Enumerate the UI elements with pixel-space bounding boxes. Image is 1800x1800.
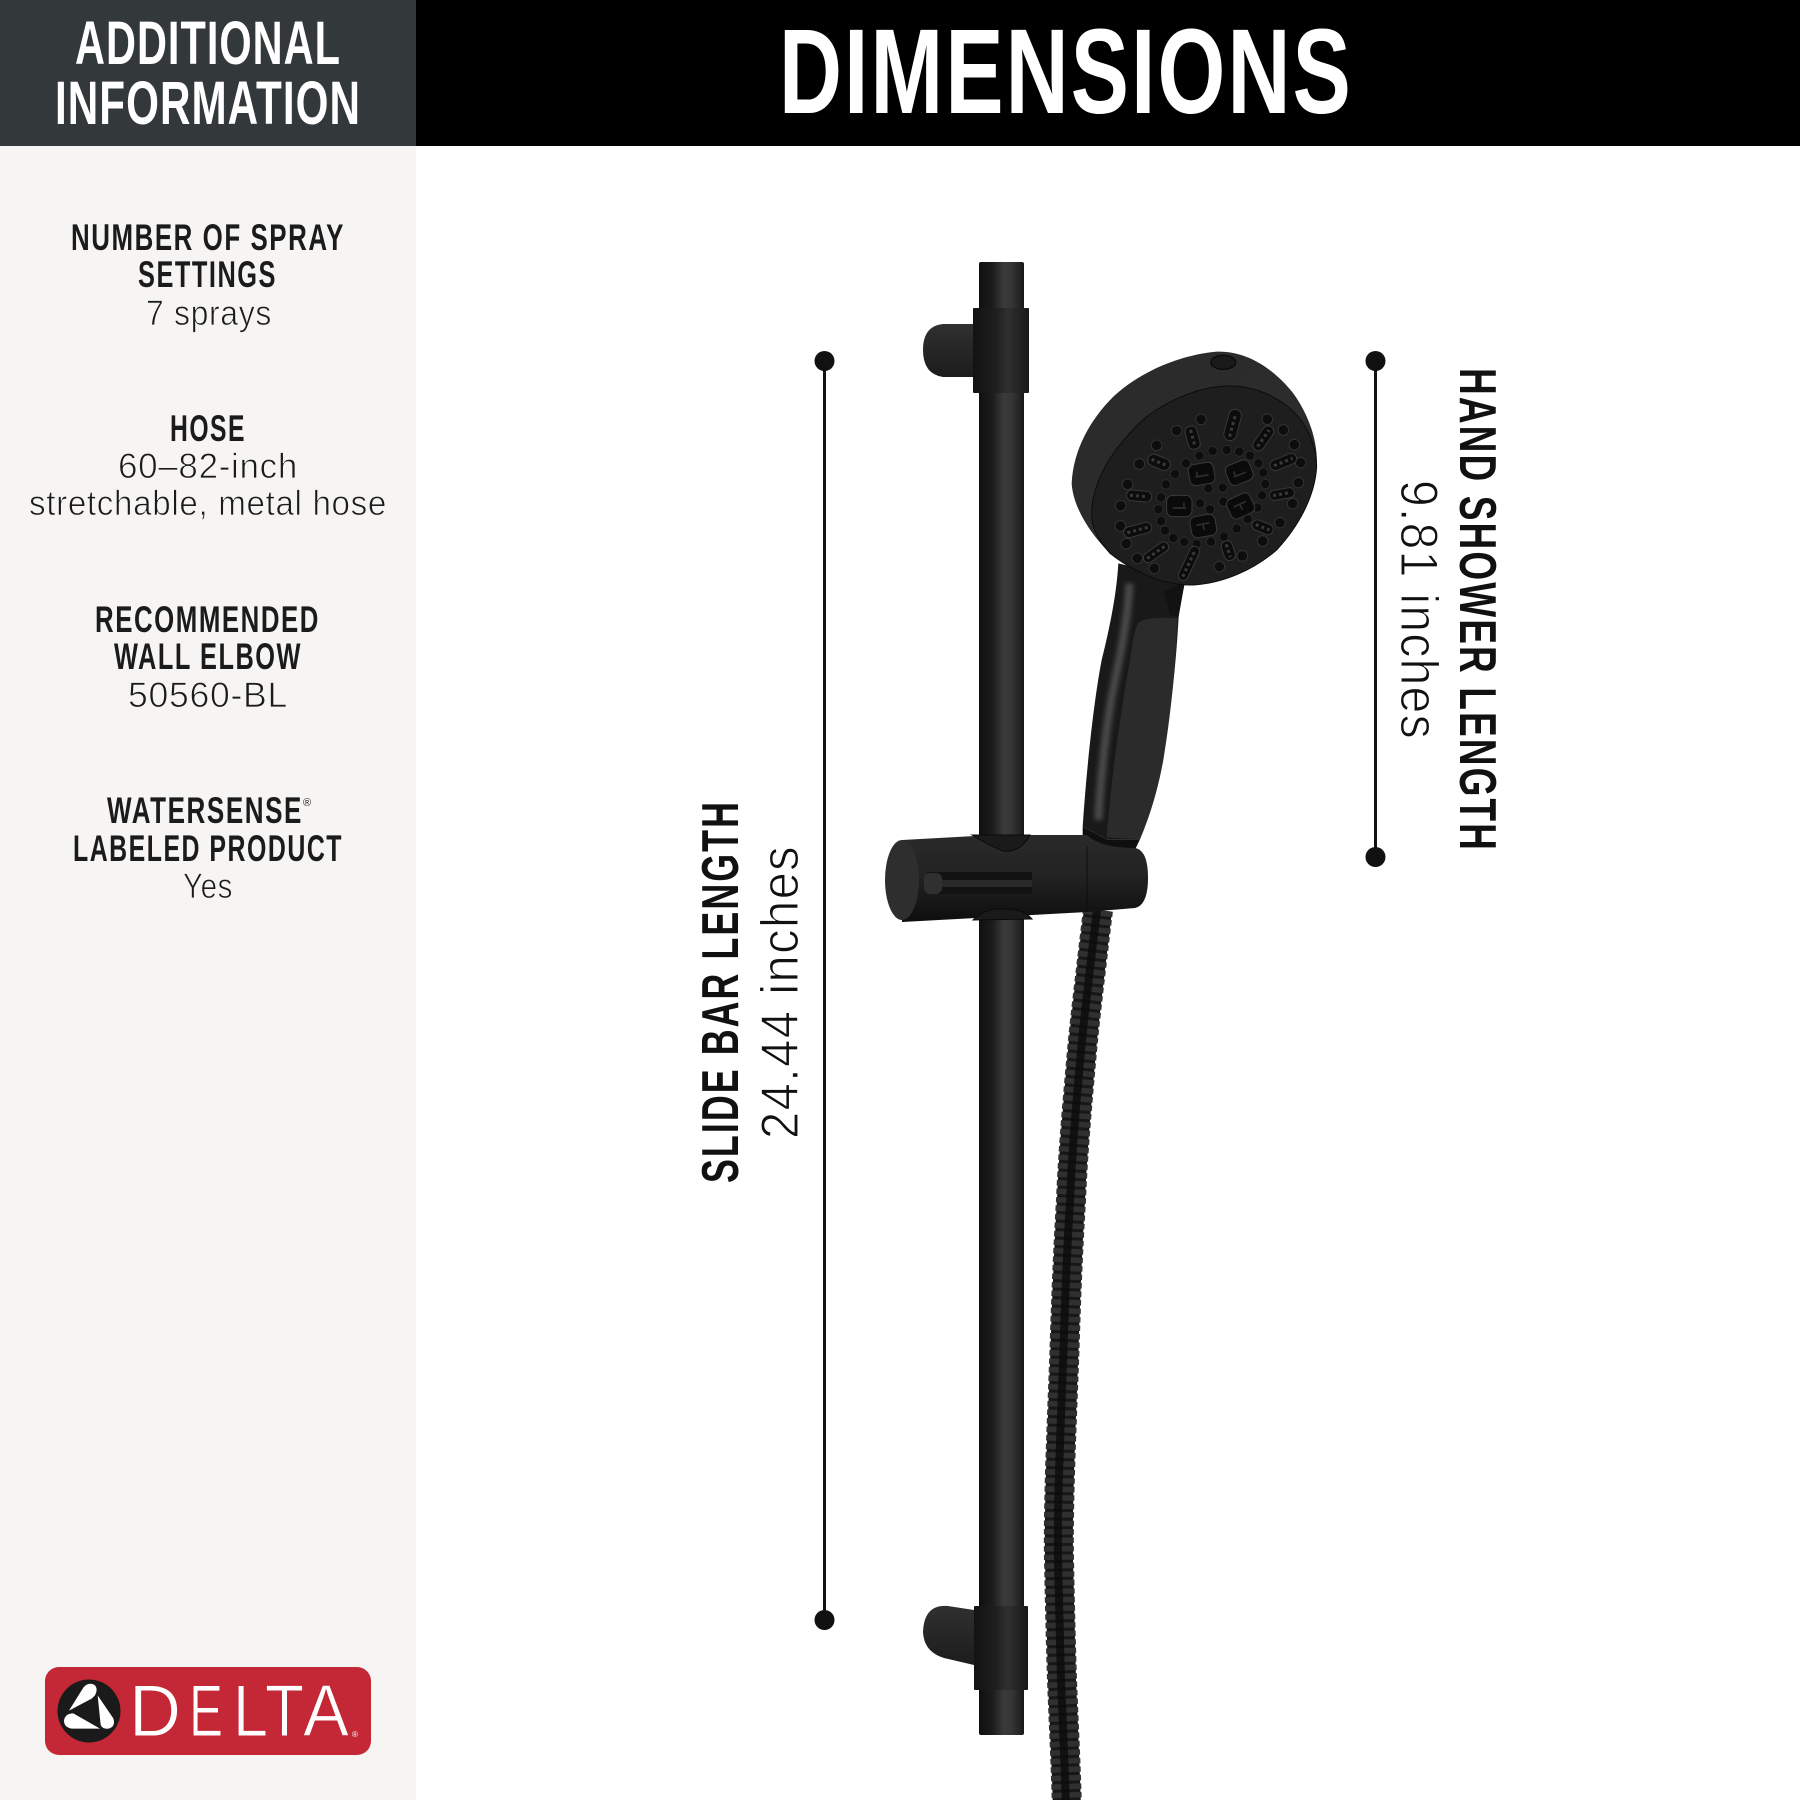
spec: watersense labeled product: WATERSENSE: [107, 790, 303, 831]
product: slider clamp: [885, 835, 1148, 922]
top button: [1211, 355, 1236, 369]
spec: recommended wall elbow: [95, 599, 320, 715]
spec: recommended wall elbow: RECOMMENDED: [95, 599, 320, 640]
dimension line: slide bar: [814, 351, 834, 1630]
capsule jets: [1127, 413, 1293, 577]
spec: hose: 60–82-inch: [118, 447, 298, 486]
hose core shading: [1058, 910, 1097, 1800]
panel: additional information: [0, 0, 416, 1800]
logo wordmark: T: [265, 1671, 304, 1752]
top collar: [973, 308, 1029, 393]
large spray nozzles: [1167, 458, 1257, 539]
slot: [927, 872, 1032, 894]
label: hand shower length: [1389, 368, 1506, 852]
head body: [1072, 352, 1317, 585]
trigger: [1164, 582, 1185, 617]
logo wordmark: L: [233, 1671, 268, 1752]
label: hand shower length: HAND SHOWER LENGTH: [1448, 368, 1506, 852]
top wall bracket: [923, 324, 973, 377]
panel header background: [0, 0, 416, 146]
bottom collar: [974, 1606, 1028, 1690]
hose ribs: [1059, 910, 1098, 1800]
product: hose: [1058, 910, 1098, 1800]
heading: additional information: [55, 9, 361, 137]
header: dimensions: [416, 0, 1800, 146]
spec: watersense labeled product: ®: [303, 797, 311, 809]
product: shower head: [1072, 352, 1317, 585]
label: slide bar length: [692, 800, 810, 1183]
handle grip panel: [1107, 618, 1177, 839]
spec: watersense labeled product: LABELED PRODUCT: [73, 828, 343, 869]
spray capsules: [1122, 408, 1298, 582]
product: slide bar: [923, 262, 1029, 1735]
spec: hose: HOSE: [170, 408, 246, 449]
heading: additional information: INFORMATION: [55, 69, 361, 137]
seam: [1086, 846, 1088, 912]
title: dimensions: DIMENSIONS: [779, 3, 1353, 139]
spec: hose: [29, 408, 387, 523]
logo wordmark: E: [189, 1671, 223, 1752]
label: hand shower length: 9.81 inches: [1389, 480, 1448, 740]
spec: watersense labeled product: Yes: [183, 867, 233, 906]
dimension line: hand shower: [1366, 351, 1386, 867]
spec: watersense labeled product: [73, 790, 343, 906]
logo wordmark: D: [129, 1671, 181, 1752]
logo: delta: [45, 1667, 371, 1755]
clamp bulges: [972, 835, 1032, 920]
label: slide bar length: SLIDE BAR LENGTH: [692, 800, 750, 1183]
product: hand shower handle: [1083, 563, 1185, 855]
spec: recommended wall elbow: WALL ELBOW: [114, 636, 302, 677]
label: slide bar length: 24.44 inches: [751, 845, 810, 1139]
spec: number of spray settings: NUMBER OF SPRAY: [71, 217, 345, 258]
outer spray holes: [1115, 414, 1306, 574]
logo mark lobes: [64, 1684, 114, 1729]
spec: hose: stretchable, metal hose: [29, 484, 387, 523]
handle base: [1083, 827, 1140, 855]
logo wordmark: [129, 1671, 349, 1752]
logo: delta: ®: [352, 1730, 358, 1739]
head face: [1092, 386, 1317, 585]
logo wordmark: A: [303, 1671, 349, 1752]
end cap: [885, 840, 919, 920]
bar: [979, 262, 1024, 1735]
heading: additional information: ADDITIONAL: [75, 9, 341, 77]
spec: number of spray settings: 7 sprays: [146, 294, 272, 333]
handle highlight band: [1098, 583, 1129, 820]
spec: number of spray settings: SETTINGS: [138, 254, 277, 295]
spec: recommended wall elbow: 50560-BL: [128, 676, 288, 715]
spec: number of spray settings: [71, 217, 345, 333]
bottom wall bracket: [923, 1606, 974, 1665]
nozzle details: [1173, 467, 1248, 531]
inner spray holes: [1154, 445, 1270, 549]
